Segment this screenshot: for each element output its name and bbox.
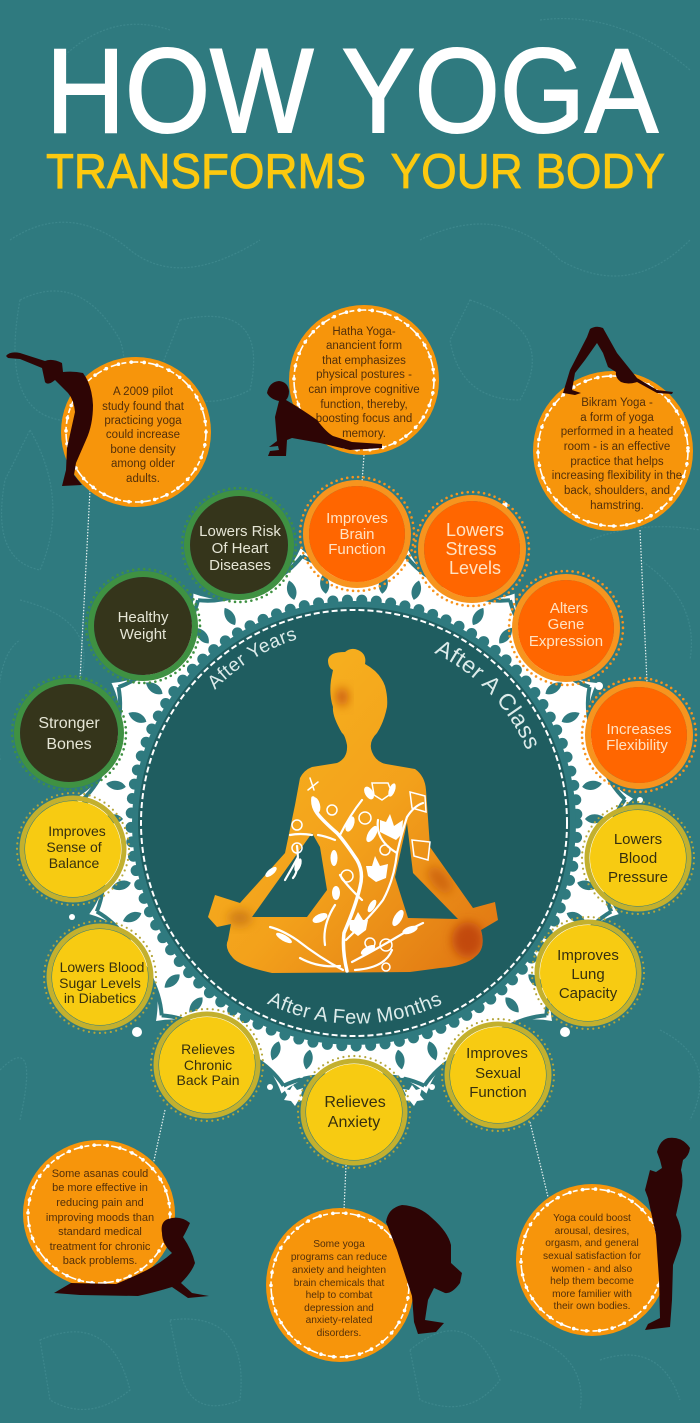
topic circle: Alters Gene Expression: Expression [529, 633, 603, 650]
topic circle: Healthy Weight: Weight [120, 626, 167, 643]
silhouette: downward dog [563, 327, 673, 395]
mandala dots and flowers [69, 502, 643, 1106]
info circle: bone density: bone density [110, 444, 176, 456]
topic circle: Improves Lung Capacity [532, 917, 644, 1029]
info circle: bone density: practicing yoga [104, 415, 182, 427]
topic circle: Improves Brain Function: Function [328, 541, 386, 558]
info circle: anxiety: brain chemicals that [294, 1278, 384, 1289]
info circle: bone density: among older [111, 458, 175, 470]
info circle: Bikram Yoga: hamstring. [590, 500, 644, 512]
connector lines [80, 455, 647, 1210]
topic circle: Improves Brain Function: Improves [326, 510, 388, 527]
info circle: back pain: Some asanas could [52, 1168, 148, 1180]
arc label: After A Few Months: After A Few Months [266, 993, 442, 1024]
info circle: Bikram Yoga: back, shoulders, and [564, 485, 670, 497]
floral vines [270, 798, 423, 971]
info circle: Hatha Yoga: function, thereby, [320, 399, 408, 411]
topic circle: Improves Sexual Function: Function [469, 1084, 527, 1101]
topic circle: Improves Sexual Function: Improves [466, 1045, 528, 1062]
title: How Yoga: HOW YOGA [46, 24, 658, 158]
info circle: back pain: be more effective in [52, 1182, 148, 1194]
info circle: Bikram Yoga: Bikram Yoga - [581, 397, 653, 409]
topic circle: Relieves Anxiety: Anxiety [328, 1114, 380, 1131]
info circle: Hatha Yoga: boosting focus and [316, 413, 412, 425]
topic circle: Improves Brain Function [300, 477, 414, 591]
topic circle: Lowers Risk Of Heart Diseases: Lowers Risk [199, 523, 281, 540]
arc label: After A Class: After A Class [434, 642, 537, 749]
info circle: sexual function: help them become [550, 1276, 634, 1287]
info circle: bone density: could increase [106, 429, 180, 441]
topic circle: Relieves Anxiety: Relieves [324, 1094, 386, 1111]
info circle: sexual function: women - and also [551, 1264, 633, 1275]
topic circle: Improves Sense of Balance: Balance [49, 855, 100, 871]
silhouette: forward fold [386, 1205, 462, 1334]
info circle: bone density: adults. [126, 473, 160, 485]
info circle: Bikram Yoga: room - is an effective [564, 441, 670, 453]
topic circle: Stronger Bones: Stronger [38, 715, 100, 732]
subtitle: Transforms Your Body: TRANSFORMS YOUR BODY [46, 145, 665, 199]
info circle: bone density [61, 357, 211, 507]
info circle: anxiety: Some yoga [313, 1239, 365, 1250]
info circle: anxiety: programs can reduce [291, 1252, 387, 1263]
info circle: back pain [23, 1140, 175, 1288]
info circle: anxiety [266, 1208, 414, 1362]
central dark disc [138, 607, 570, 1039]
topic circle: Alters Gene Expression: Alters [550, 600, 588, 617]
topic circle: Improves Sexual Function [442, 1019, 554, 1131]
arc label: After Years: After Years [210, 630, 296, 690]
topic circle: Lowers Risk Of Heart Diseases [182, 488, 296, 602]
topic circle: Improves Sense of Balance: Sense of [46, 839, 102, 855]
info circle: back pain: standard medical [58, 1226, 142, 1238]
topic circle: Relieves Anxiety [298, 1056, 410, 1168]
topic circle: Lowers Blood Pressure [582, 802, 694, 914]
topic circle: Increases Flexibility: Increases [606, 721, 672, 738]
topic circle: Lowers Blood Pressure: Pressure [608, 869, 668, 886]
silhouette: standing back bend [6, 352, 93, 486]
topic circle: Lowers Blood Sugar Levels in Diabetics: Lowers Blood [60, 959, 144, 975]
topic circle: Lowers Blood Pressure: Blood [619, 850, 657, 867]
figure: meditating woman in watercolor orange with white floral vines [208, 649, 498, 973]
topic circle: Improves Sense of Balance: Improves [48, 823, 106, 839]
info circle: bone density: A 2009 pilot [113, 386, 174, 398]
silhouette: upward dog [267, 381, 382, 456]
topic circle: Lowers Blood Sugar Levels in Diabetics: Sugar Levels [59, 975, 141, 991]
topic circle: Stronger Bones: Bones [46, 736, 92, 753]
topic circle: Improves Lung Capacity: Capacity [559, 985, 618, 1002]
mandala ring [71, 539, 637, 1105]
info circle: Hatha Yoga [289, 305, 439, 455]
info circle: back pain: treatment for chronic [50, 1241, 151, 1253]
info circle: Hatha Yoga: anancient form [326, 340, 402, 352]
info circle: anxiety: disorders. [317, 1328, 361, 1339]
info circle: sexual function: sexual satisfaction for [543, 1251, 642, 1262]
silhouette: cobra pose [54, 1218, 209, 1298]
topic circle: Increases Flexibility [582, 678, 696, 792]
info circle: bone density: study found that [102, 401, 185, 413]
topic circle: Relieves Chronic Back Pain: Back Pain [176, 1072, 240, 1088]
topic circle: Relieves Chronic Back Pain: Chronic [184, 1057, 232, 1073]
topic circle: Relieves Chronic Back Pain [151, 1009, 263, 1121]
topic circle: Lowers Blood Sugar Levels in Diabetics: in Diabetics [64, 990, 136, 1006]
topic circle: Improves Lung Capacity: Lung [571, 966, 605, 983]
topic circle: Lowers Stress Levels: Levels [449, 558, 501, 578]
info circle: sexual function: more familier with [552, 1289, 632, 1300]
topic circle: Lowers Stress Levels: Stress [445, 539, 497, 559]
info circle: sexual function: orgasm, and general [545, 1238, 639, 1249]
info circle: Hatha Yoga: Hatha Yoga- [332, 326, 396, 338]
topic circle: Alters Gene Expression: Gene [548, 616, 584, 633]
info circle: back pain: reducing pain and [56, 1197, 144, 1209]
info circle: anxiety: anxiety-related [306, 1315, 373, 1326]
info circle: Bikram Yoga: increasing flexibility in the [552, 470, 682, 482]
info circle: Hatha Yoga: that emphasizes [322, 355, 406, 367]
info circle: back pain: improving moods than [46, 1212, 154, 1224]
info circle: anxiety: help to combat [306, 1290, 373, 1301]
dashed ring [141, 610, 567, 1036]
info circle: sexual function [516, 1184, 668, 1336]
info circle: sexual function: arousal, desires, [555, 1226, 629, 1237]
topic circle: Improves Brain Function: Brain [339, 526, 375, 543]
info circle: Bikram Yoga: performed in a heated [561, 426, 673, 438]
info circle: back pain: back problems. [63, 1255, 137, 1267]
topic circle: Lowers Risk Of Heart Diseases: Diseases [209, 557, 271, 574]
info circle: Bikram Yoga [533, 371, 693, 531]
info circle: Hatha Yoga: can improve cognitive [308, 384, 420, 396]
info circle: Bikram Yoga: practice that helps [570, 456, 664, 468]
info circle: anxiety: anxiety and heighten [292, 1265, 386, 1276]
info circle: sexual function: their own bodies. [553, 1301, 631, 1312]
topic circle: Increases Flexibility: Flexibility [606, 737, 668, 754]
info circle: sexual function: Yoga could boost [553, 1213, 631, 1224]
topic circle: Alters Gene Expression [509, 571, 623, 685]
topic circle: Lowers Blood Sugar Levels in Diabetics [44, 921, 156, 1033]
topic circle: Stronger Bones [12, 676, 126, 790]
topic circle: Lowers Blood Pressure: Lowers [614, 831, 662, 848]
topic circle: Lowers Stress Levels [415, 492, 529, 606]
topic circle: Lowers Risk Of Heart Diseases: Of Heart [212, 540, 269, 557]
silhouette: standing prayer pose [645, 1138, 690, 1330]
info circle: anxiety: depression and [304, 1303, 374, 1314]
info circle: Hatha Yoga: memory. [342, 428, 386, 440]
topic circle: Healthy Weight [86, 569, 200, 683]
topic circle: Improves Lung Capacity: Improves [557, 947, 619, 964]
topic circle: Improves Sense of Balance [17, 793, 129, 905]
info circle: Bikram Yoga: a form of yoga [580, 412, 654, 424]
topic circle: Lowers Stress Levels: Lowers [446, 520, 504, 540]
topic circle: Healthy Weight: Healthy [118, 609, 169, 626]
info circle: Hatha Yoga: physical postures - [316, 369, 412, 381]
topic circle: Improves Sexual Function: Sexual [475, 1065, 521, 1082]
topic circle: Relieves Chronic Back Pain: Relieves [181, 1041, 235, 1057]
